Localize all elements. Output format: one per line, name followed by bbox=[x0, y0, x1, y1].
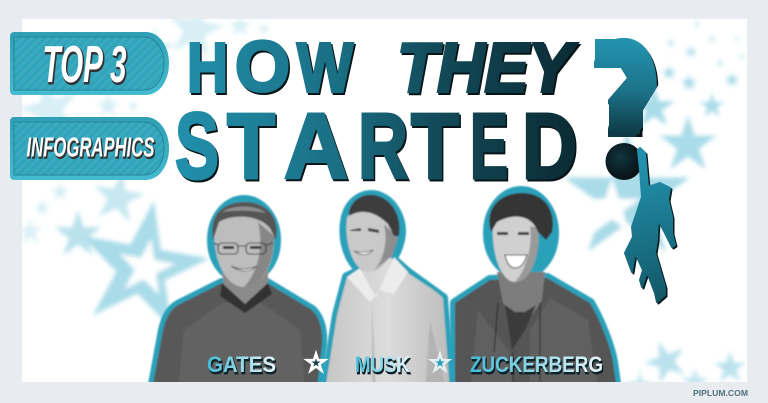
hanging figure silhouette bbox=[625, 148, 676, 304]
title: how they started: D bbox=[524, 96, 578, 200]
title: how they started: THEY bbox=[397, 28, 577, 106]
title: how they started: THEY bbox=[398, 30, 578, 108]
title: how they started: E bbox=[472, 96, 510, 200]
portrait: Zuckerberg bbox=[455, 191, 617, 390]
name: Zuckerberg: ZUCKERBERG bbox=[471, 354, 604, 379]
portrait: Musk bbox=[325, 195, 450, 390]
title: how they started: A bbox=[286, 96, 350, 200]
portrait: Gates bbox=[152, 200, 322, 390]
name: Zuckerberg: ZUCKERBERG bbox=[470, 352, 603, 377]
title: how they started: R bbox=[358, 94, 408, 198]
title: how they started: S bbox=[175, 93, 219, 198]
title: how they started: D bbox=[522, 94, 577, 198]
site credit: PIPLUM.COM bbox=[693, 388, 748, 398]
badge: top 3: TOP 3 bbox=[44, 38, 128, 96]
title: how they started: H bbox=[187, 28, 228, 106]
badge: infographics bbox=[10, 117, 169, 180]
title: how they started: T bbox=[228, 96, 276, 200]
title: how they started: S bbox=[176, 95, 220, 200]
badge: top 3 bbox=[10, 32, 169, 96]
question mark: ? bbox=[590, 13, 656, 219]
badge: infographics: INFOGRAPHICS bbox=[26, 132, 155, 162]
title: how they started: H bbox=[188, 30, 230, 108]
title: how they started: A bbox=[284, 94, 348, 198]
title: how they started: T bbox=[412, 96, 460, 200]
title: how they started: W bbox=[298, 30, 354, 108]
name labels bbox=[207, 352, 604, 379]
badge: infographics: INFOGRAPHICS bbox=[28, 133, 156, 164]
name: Gates: GATES bbox=[208, 354, 277, 379]
title: how they started: O bbox=[235, 28, 290, 107]
title: how they started: E bbox=[470, 94, 508, 198]
title: how they started: W bbox=[297, 28, 353, 106]
name: Musk: MUSK bbox=[355, 352, 410, 377]
title: how they started bbox=[175, 28, 578, 200]
title: how they started: O bbox=[236, 30, 292, 109]
question mark: ? bbox=[592, 15, 658, 221]
small star separators bbox=[307, 354, 449, 370]
badge: top 3: TOP 3 bbox=[42, 36, 127, 94]
title: how they started: R bbox=[360, 96, 410, 200]
title: how they started: T bbox=[227, 94, 275, 198]
title: how they started: T bbox=[411, 94, 459, 198]
name: Musk: MUSK bbox=[356, 354, 411, 379]
name: Gates: GATES bbox=[207, 352, 276, 377]
question mark bbox=[594, 38, 658, 180]
